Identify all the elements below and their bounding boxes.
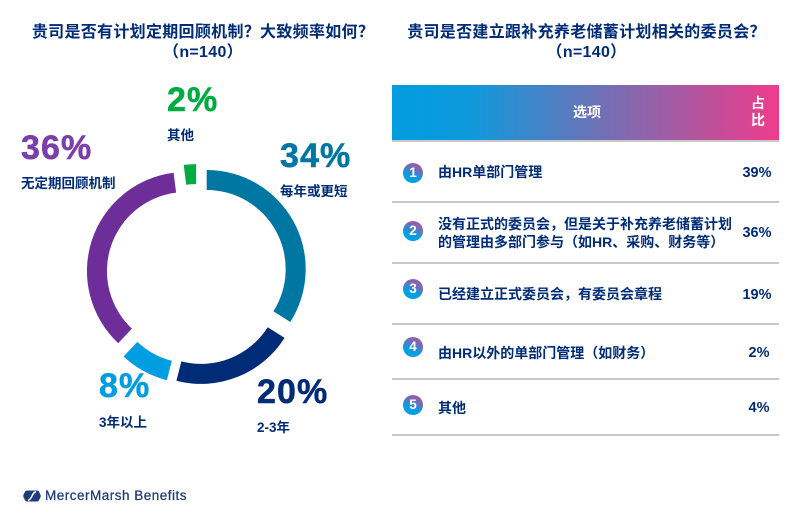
label: 36% no regular review: 无定期回顾机制 — [21, 176, 116, 191]
header: share: 占 — [751, 95, 765, 111]
logo: MercerMarsh Benefits — [23, 488, 187, 503]
logo wordmark: MercerMarsh Benefits — [45, 488, 187, 503]
row 4 number — [403, 337, 423, 357]
row 3 text: 已经建立正式委员会，有委员会章程 — [438, 286, 662, 302]
label: 2% other — [167, 81, 218, 143]
logo mark — [23, 490, 41, 502]
table row 2 — [403, 216, 772, 250]
left title: （n=140） — [163, 44, 243, 61]
segment: 20% 2-3 years — [176, 327, 285, 384]
right title — [407, 23, 766, 61]
label: 34% every year or shorter — [280, 137, 351, 199]
left title — [32, 23, 374, 61]
row 4 text: 由HR以外的单部门管理（如财务） — [438, 344, 654, 360]
label: 2% other: 2% — [167, 81, 218, 119]
label: 34% every year or shorter: 每年或更短 — [280, 184, 348, 199]
table row 5 — [403, 395, 770, 416]
label: 36% no regular review — [21, 129, 116, 191]
label: 34% every year or shorter: 34% — [280, 137, 351, 175]
label: 20% 2-3 years — [257, 373, 328, 435]
row 2 percent: 36% — [742, 225, 772, 241]
row 2 text — [438, 216, 732, 250]
table row 1 — [403, 163, 772, 183]
row 5 text: 其他 — [438, 400, 466, 416]
right title: （n=140） — [547, 44, 626, 61]
header: share: 比 — [751, 112, 765, 128]
row 3 number — [403, 279, 423, 299]
row 4 percent: 2% — [749, 344, 769, 360]
label: 2% other: 其他 — [167, 128, 194, 143]
label: 20% 2-3 years: 2-3年 — [257, 420, 290, 435]
left title: 贵司是否有计划定期回顾机制？大致频率如何？ — [32, 24, 374, 41]
row 5 number: 5 — [409, 397, 417, 412]
label: 8% 3 years or more: 3年以上 — [99, 415, 147, 430]
right title: 贵司是否建立跟补充养老储蓄计划相关的委员会？ — [407, 24, 766, 41]
table row 3 — [403, 279, 772, 303]
row 4 number: 4 — [409, 339, 417, 354]
segment: 2% other — [184, 164, 196, 185]
segment: 8% 3 years or more — [124, 342, 172, 380]
label: 8% 3 years or more: 8% — [99, 367, 150, 405]
row 5 number — [403, 395, 423, 415]
segment: 36% no regular review — [87, 173, 176, 343]
label: 20% 2-3 years: 20% — [257, 373, 328, 411]
label: 36% no regular review: 36% — [21, 129, 92, 167]
row 1 number — [403, 162, 423, 182]
row 1 percent: 39% — [742, 164, 772, 180]
label: 8% 3 years or more — [99, 367, 150, 430]
donut chart — [86, 164, 306, 384]
row 1 number: 1 — [409, 164, 417, 180]
row 1 text: 由HR单部门管理 — [438, 164, 542, 180]
row 3 percent: 19% — [742, 287, 772, 303]
segment: 34% every year or shorter — [207, 170, 306, 322]
row 3 number: 3 — [409, 281, 417, 296]
row 5 percent: 4% — [749, 400, 769, 416]
table row 4 — [403, 337, 770, 360]
row 2 number: 2 — [409, 223, 417, 238]
row 2 text: 没有正式的委员会，但是关于补充养老储蓄计划 — [438, 216, 732, 232]
row 2 number — [403, 221, 423, 241]
header: option: 选项 — [573, 104, 601, 120]
table header — [392, 85, 779, 140]
header: share — [751, 95, 765, 128]
row 2 text: 的管理由多部门参与（如HR、采购、财务等） — [438, 234, 724, 250]
